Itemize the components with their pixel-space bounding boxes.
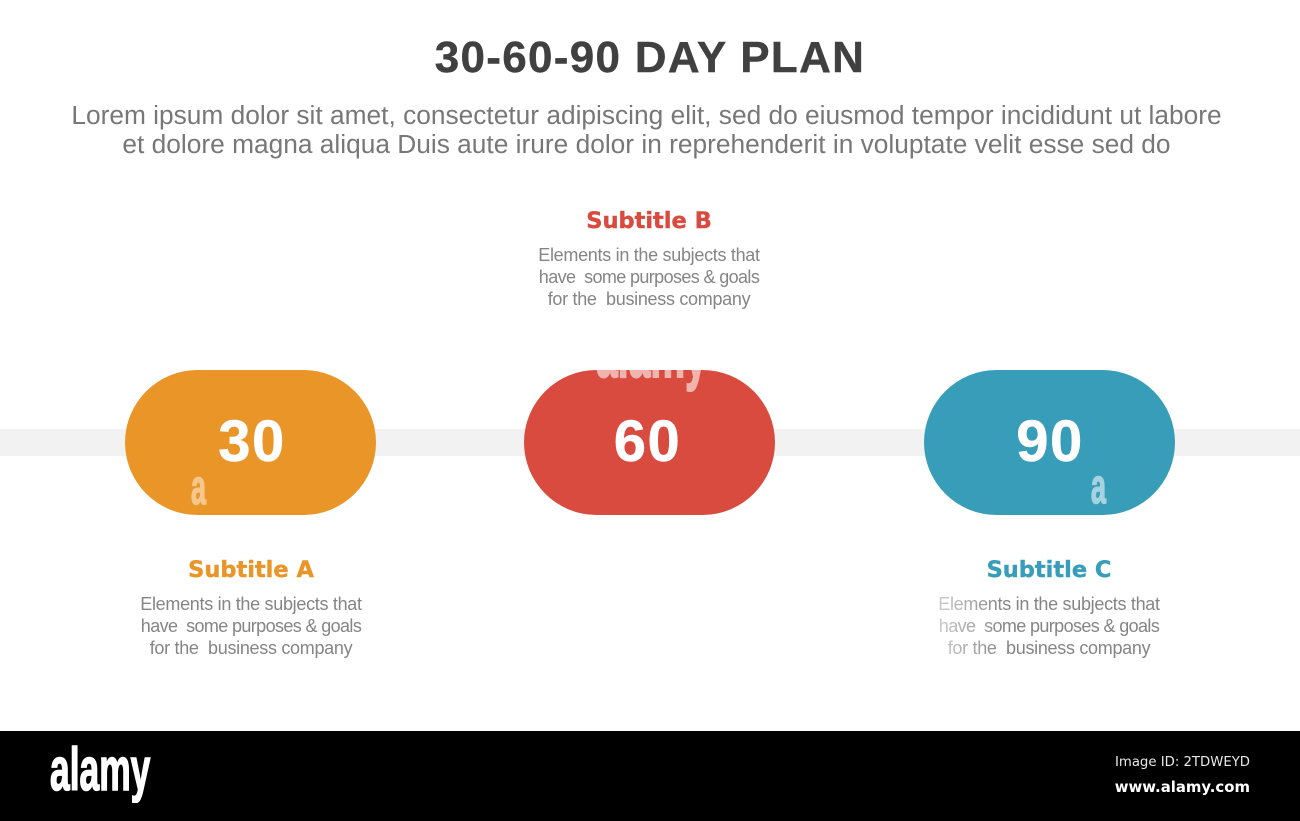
subtitle B text: Elements in the subjects that	[538, 245, 760, 265]
subtitle A block	[140, 557, 362, 658]
subtitle C text: have some purposes & goals	[939, 616, 1159, 636]
subtitle B block	[538, 208, 760, 309]
subtitle B text: for the business company	[548, 289, 750, 309]
intro text: Lorem ipsum dolor sit amet, consectetur adipiscing elit, sed do eiusmod tempor incididunt ut labore	[71, 100, 1222, 130]
alamy logo: alamy	[50, 736, 150, 803]
number 60: 60	[614, 409, 681, 474]
subtitle A text: have some purposes & goals	[141, 616, 361, 636]
subtitle C heading: Subtitle C	[987, 557, 1111, 583]
intro text: et dolore magna aliqua Duis aute irure dolor in reprehenderit in voluptate velit esse sed do	[122, 129, 1171, 159]
subtitle C text: Elements in the subjects that	[938, 594, 1160, 614]
pill 90	[924, 370, 1175, 515]
subtitle C text: for the business company	[948, 638, 1150, 658]
title: 30-60-90 DAY PLAN	[435, 33, 865, 82]
subtitle A text: for the business company	[150, 638, 352, 658]
subtitle C text	[938, 594, 1160, 658]
pill 30	[125, 370, 376, 515]
subtitle A heading: Subtitle A	[188, 557, 314, 583]
website: www.alamy.com	[1115, 778, 1250, 796]
watermark letter a: a	[191, 460, 206, 514]
number 90: 90	[1016, 409, 1084, 474]
image id: Image ID: 2TDWEYD	[1115, 755, 1250, 770]
subtitle B text	[538, 245, 760, 309]
pill 60	[524, 370, 775, 515]
intro text	[71, 100, 1222, 159]
watermark letter a: a	[1091, 460, 1106, 514]
footer bar	[0, 731, 1300, 821]
subtitle A text: Elements in the subjects that	[140, 594, 362, 614]
subtitle B text: have some purposes & goals	[539, 267, 759, 287]
subtitle C block	[938, 557, 1160, 658]
timeline band	[0, 429, 1300, 456]
subtitle B heading: Subtitle B	[586, 208, 712, 234]
subtitle A text	[140, 594, 362, 658]
number 30: 30	[218, 409, 286, 474]
